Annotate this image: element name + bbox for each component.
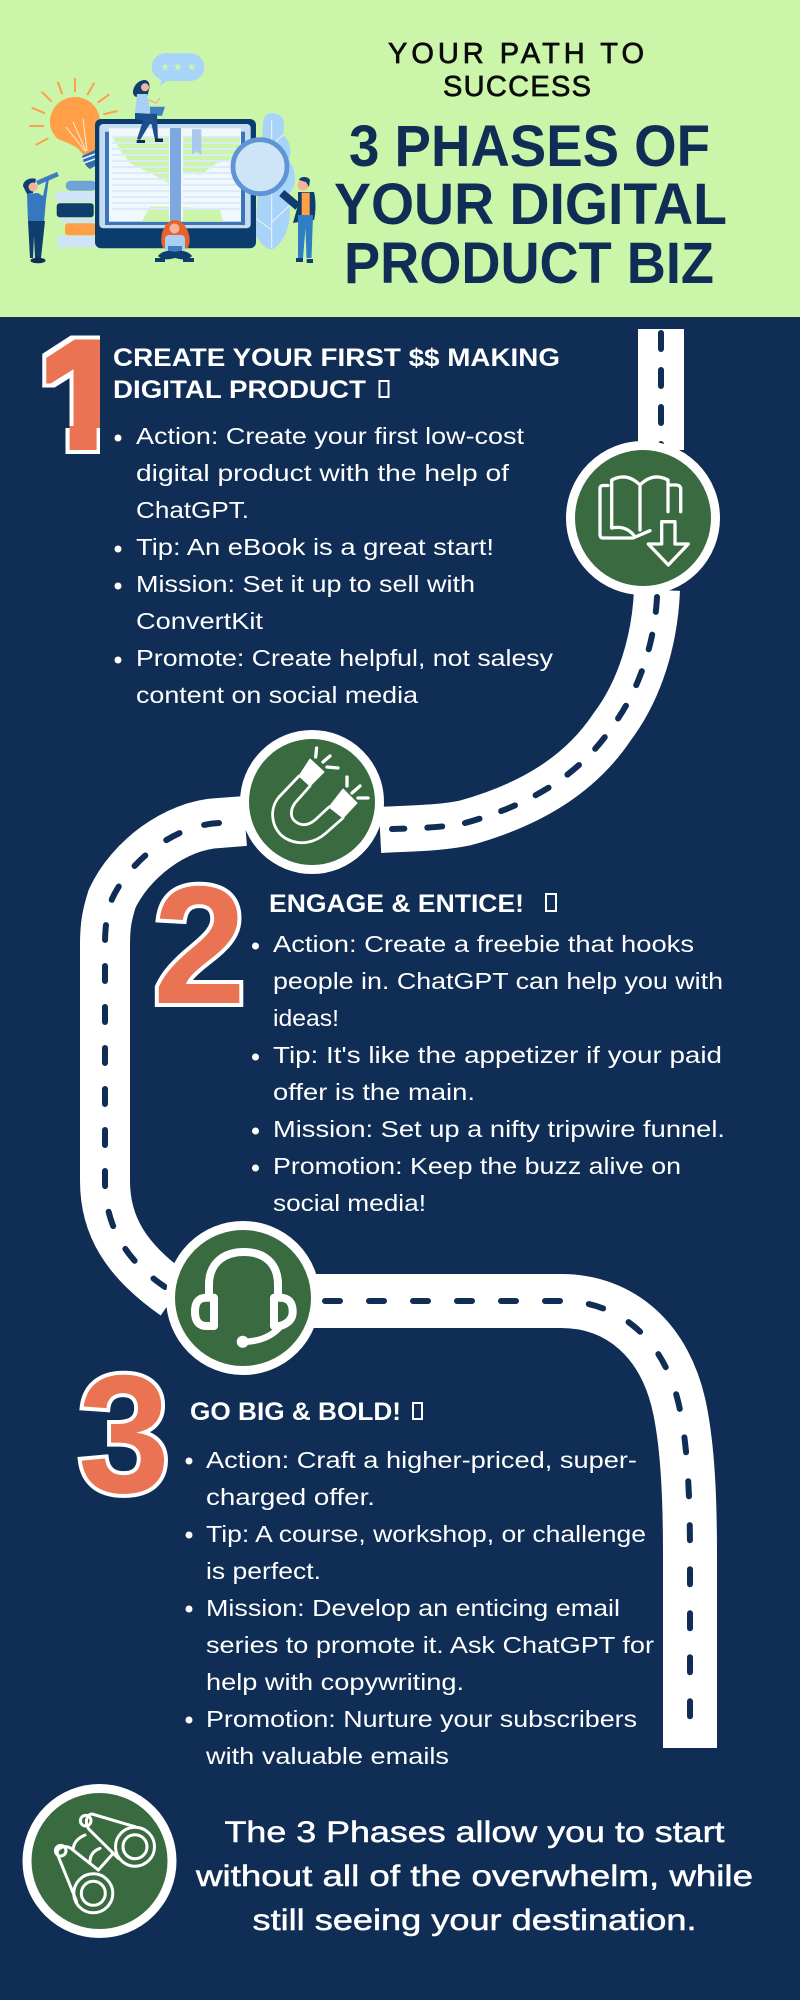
list: phase 3: charged offer. xyxy=(206,1484,375,1510)
subtitle: YOUR PATH TO xyxy=(388,38,644,70)
heading: phase 1 xyxy=(113,344,560,404)
icon: light bulb xyxy=(29,78,117,169)
title: 3 PHASES OF xyxy=(349,114,710,179)
person: man with magnifier xyxy=(293,177,316,263)
list: phase 2: ideas! xyxy=(273,1005,339,1031)
icon: binoculars xyxy=(27,1788,172,1934)
list: phase 3: Action: Craft a higher-priced, super- xyxy=(206,1447,637,1473)
list: phase 3: with valuable emails xyxy=(205,1743,449,1769)
list: phase 2 xyxy=(252,931,725,1216)
title: PRODUCT BIZ xyxy=(344,231,714,296)
heading: phase 1: DIGITAL PRODUCT xyxy=(113,376,366,404)
magnifying glass xyxy=(233,140,298,207)
list: phase 1: ConvertKit xyxy=(136,608,264,634)
list: phase 3: is perfect. xyxy=(206,1558,321,1584)
list: phase 3: Promotion: Nurture your subscribers xyxy=(206,1706,637,1732)
leaf xyxy=(255,113,295,249)
open book on tablet xyxy=(95,119,256,248)
number 1 xyxy=(42,336,100,454)
speech bubble with stars xyxy=(152,53,204,86)
heading: phase 3: GO BIG & BOLD! xyxy=(190,1398,401,1426)
icon: headset xyxy=(170,1226,316,1370)
list: phase 1: Promote: Create helpful, not salesy xyxy=(136,645,553,671)
icon: book download xyxy=(570,446,716,590)
person: woman on book xyxy=(133,80,165,143)
closing statement: without all of the overwhelm, while xyxy=(195,1860,753,1893)
number 1: 1 xyxy=(37,308,129,492)
list: phase 2: people in. ChatGPT can help you with xyxy=(273,968,723,994)
title: YOUR DIGITAL xyxy=(334,172,727,237)
list: phase 3: series to promote it. Ask ChatGPT for xyxy=(206,1632,654,1658)
subtitle xyxy=(388,38,644,103)
list: phase 1: content on social media xyxy=(136,682,419,708)
panel: phase 2 xyxy=(153,851,725,1216)
list: phase 2: Promotion: Keep the buzz alive on xyxy=(273,1153,681,1179)
title xyxy=(334,114,727,296)
list: phase 2: Mission: Set up a nifty tripwire funnel. xyxy=(273,1116,725,1142)
list: phase 2: Action: Create a freebie that hooks xyxy=(273,931,694,957)
road xyxy=(105,329,690,1748)
list: phase 1: Mission: Set it up to sell with xyxy=(136,571,475,597)
closing statement xyxy=(195,1816,753,1937)
list: phase 2: Tip: It's like the appetizer if your paid xyxy=(273,1042,722,1068)
person: woman sitting with laptop xyxy=(155,220,194,262)
list: phase 1: digital product with the help of xyxy=(136,460,510,486)
list: phase 1 xyxy=(114,423,553,708)
list: phase 3: Mission: Develop an enticing email xyxy=(206,1595,620,1621)
list: phase 3 xyxy=(186,1447,654,1769)
list: phase 2: social media! xyxy=(273,1190,426,1216)
list: phase 1: Tip: An eBook is a great start! xyxy=(136,534,494,560)
list: phase 3: Tip: A course, workshop, or challenge xyxy=(206,1521,646,1547)
heading: phase 2: ENGAGE & ENTICE! xyxy=(269,890,524,918)
panel: phase 1 xyxy=(37,308,560,708)
heading: phase 1: CREATE YOUR FIRST $$ MAKING xyxy=(113,344,560,372)
list: phase 3: help with copywriting. xyxy=(206,1669,464,1695)
panel: header xyxy=(0,0,800,317)
list: phase 1: Action: Create your first low-cost xyxy=(136,423,525,449)
list: phase 2: offer is the main. xyxy=(273,1079,475,1105)
number 2: 2 xyxy=(153,851,246,1039)
list: phase 1: ChatGPT. xyxy=(136,497,249,523)
closing statement: still seeing your destination. xyxy=(252,1904,696,1937)
subtitle: SUCCESS xyxy=(443,71,591,103)
illustration: book with people xyxy=(23,53,316,263)
icon: magnet xyxy=(244,734,380,870)
panel: phase 3 xyxy=(78,1340,654,1769)
closing statement: The 3 Phases allow you to start xyxy=(224,1816,725,1849)
book stack xyxy=(56,181,97,247)
number 3: 3 xyxy=(78,1340,170,1528)
person: man with telescope xyxy=(23,174,58,263)
